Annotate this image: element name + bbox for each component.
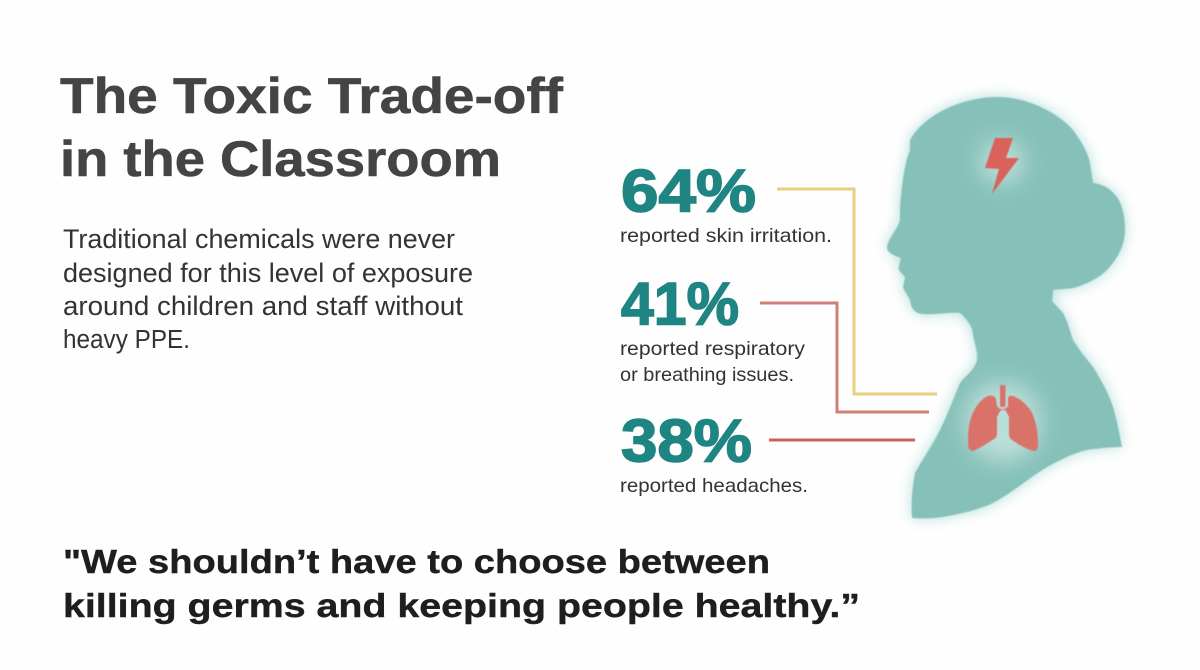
head glow [980, 140, 1024, 184]
stat: 41% respiratory: reported respiratory [620, 338, 805, 360]
connector line: skin irritation [777, 189, 937, 394]
silhouette body [887, 97, 1125, 518]
body text: around children and staff without [63, 291, 464, 321]
stat: 41% respiratory [620, 270, 805, 386]
body text: Traditional chemicals were never [63, 224, 455, 254]
stat: 38% headaches: reported headaches. [620, 475, 808, 497]
title: in the Classroom [60, 131, 501, 187]
connector line: headaches [769, 438, 915, 442]
icon: lungs [968, 385, 1038, 451]
quote [63, 543, 860, 624]
stat: 64% skin irritation: 64% [621, 158, 756, 224]
silhouette figure [887, 97, 1125, 518]
body text: designed for this level of exposure [63, 258, 473, 288]
stat: 41% respiratory: 41% [621, 270, 739, 338]
title [60, 68, 563, 187]
silhouette glow [887, 97, 1125, 518]
title: The Toxic Trade-off [60, 68, 563, 124]
body text [63, 224, 473, 354]
icon: lightning bolt [985, 138, 1019, 194]
connector line: respiratory [760, 303, 929, 412]
stat: 38% headaches [620, 408, 808, 497]
body text: heavy PPE. [63, 326, 190, 354]
stat: 41% respiratory: or breathing issues. [620, 364, 794, 386]
stat: 38% headaches: 38% [621, 408, 752, 474]
quote: killing germs and keeping people healthy.” [63, 587, 860, 624]
stat: 64% skin irritation [620, 158, 832, 247]
stat: 64% skin irritation: reported skin irritation. [620, 225, 832, 247]
quote: "We shouldn’t have to choose between [63, 543, 770, 580]
chest glow [965, 382, 1041, 462]
